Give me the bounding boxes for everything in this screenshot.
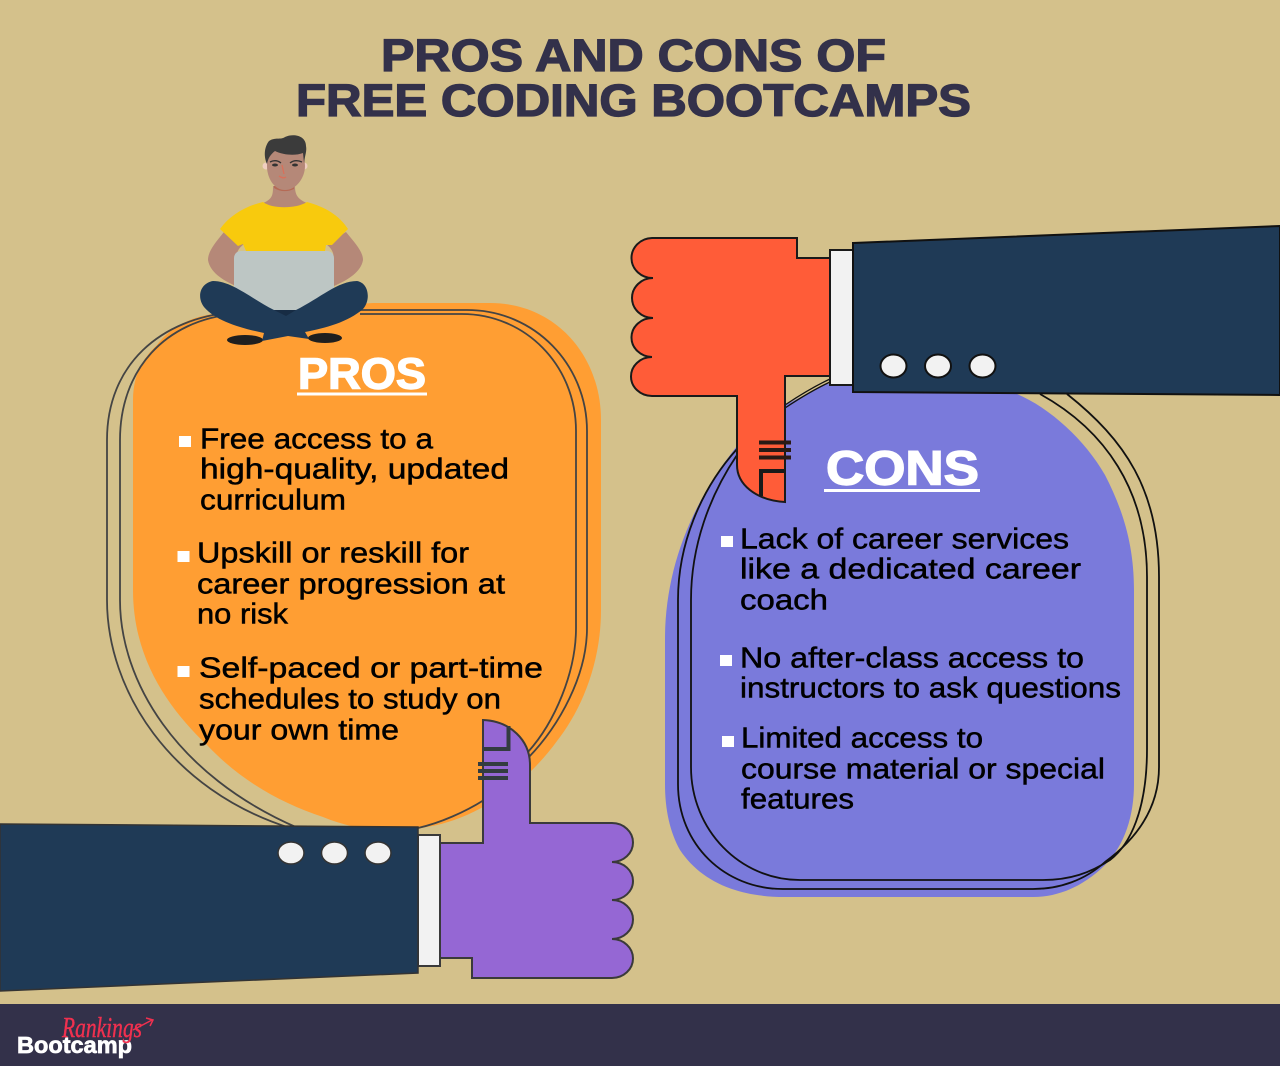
- hair: [265, 135, 306, 164]
- cons item 1: coach: [740, 584, 828, 616]
- panel: cons: [665, 379, 1159, 897]
- title: PROS AND CONS OF: [381, 30, 886, 81]
- cons heading: CONS: [826, 442, 979, 496]
- cons purple blob: [665, 384, 1134, 897]
- cons item 2: instructors to ask questions: [740, 672, 1121, 704]
- nose and mouth: [279, 165, 286, 178]
- eyes and brows: [270, 161, 302, 163]
- cons item 1: Lack of career services: [740, 524, 1069, 556]
- cons item 1: [721, 524, 1081, 616]
- arms: [208, 232, 244, 286]
- pros orange blob: [133, 303, 601, 830]
- pros item 3: schedules to study on: [199, 684, 501, 716]
- logo: Bootcamp: [17, 1032, 132, 1058]
- cons item 3: Limited access to: [741, 722, 983, 754]
- pros heading: PROS: [298, 350, 426, 398]
- cons outer outline: [678, 394, 1159, 889]
- logo: Rankings: [61, 1013, 142, 1044]
- navy sleeve: [0, 824, 418, 991]
- cons item 3: course material or special: [741, 754, 1105, 786]
- white cuff: [830, 250, 853, 385]
- cons item 2: [720, 642, 1121, 704]
- pros item 2: career progression at: [197, 568, 505, 600]
- cons item 3: features: [741, 784, 854, 816]
- pros item 3: Self-paced or part-time: [199, 652, 543, 684]
- ears: [262, 162, 270, 170]
- cons inner outline: [691, 394, 1147, 880]
- pros inner outline: [120, 314, 576, 828]
- footer bar: [0, 1004, 1280, 1066]
- icon: thumbs up hand: [0, 720, 633, 991]
- cons item 1: like a dedicated career: [740, 554, 1081, 586]
- small outline arc near thumb: [785, 379, 830, 408]
- pros item 2: Upskill or reskill for: [197, 538, 469, 570]
- sleeve buttons: [278, 842, 391, 864]
- knuckle lines: [759, 442, 791, 458]
- pros item 3: [178, 652, 543, 746]
- icon: thumbs down hand: [631, 226, 1280, 502]
- title: FREE CODING BOOTCAMPS: [296, 75, 971, 126]
- face: [267, 150, 305, 190]
- pros item 1: high-quality, updated: [200, 454, 509, 486]
- laptop shadow: [274, 310, 296, 316]
- pros item 1: curriculum: [200, 484, 346, 516]
- red hand: [631, 238, 830, 502]
- purple hand: [440, 720, 633, 978]
- shoes: [227, 335, 263, 345]
- white cuff: [418, 835, 440, 966]
- pros item 1: Free access to a: [200, 424, 434, 456]
- pros item 2: no risk: [197, 598, 289, 630]
- pros item 3: your own time: [199, 714, 399, 746]
- pros outer outline: [107, 310, 587, 828]
- pros item 1: [179, 424, 509, 516]
- sleeve buttons: [880, 354, 996, 378]
- cons item 2: No after-class access to: [740, 642, 1084, 674]
- panel: pros: [107, 303, 601, 830]
- nail: [761, 471, 785, 496]
- title: [296, 30, 971, 126]
- cons item 3: [722, 722, 1105, 816]
- laptop: [234, 251, 334, 313]
- navy sleeve: [853, 226, 1280, 395]
- logo: [17, 1013, 153, 1058]
- neck: [263, 186, 307, 208]
- pros item 2: [178, 538, 505, 630]
- shirt: [220, 202, 348, 251]
- crossed legs: [200, 281, 368, 341]
- nail: [483, 726, 508, 749]
- icon: person with laptop: [200, 135, 368, 345]
- knuckle lines: [478, 764, 508, 778]
